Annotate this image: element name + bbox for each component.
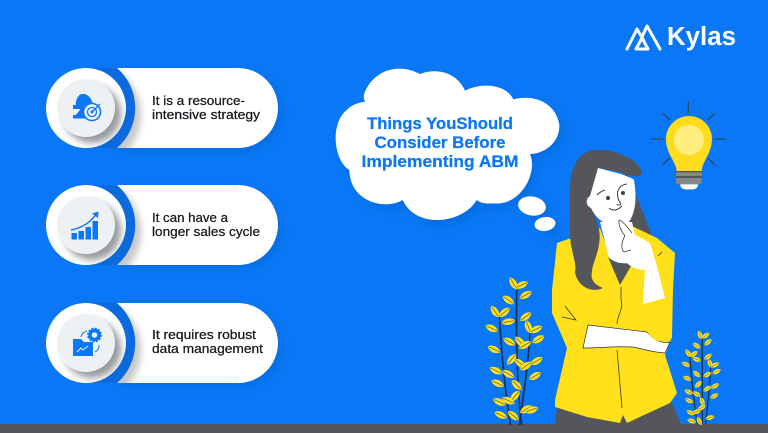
trousers bbox=[555, 398, 681, 424]
title: Consider Before bbox=[374, 134, 506, 152]
text: intensive strategy bbox=[152, 107, 261, 122]
jacket bbox=[552, 226, 677, 423]
text: It requires robust bbox=[152, 327, 256, 342]
hair front bbox=[570, 150, 642, 290]
text: longer sales cycle bbox=[152, 224, 260, 239]
icon: chess knight and target bbox=[73, 94, 100, 120]
plant: right bbox=[681, 330, 722, 426]
face bbox=[587, 168, 635, 227]
title: Implementing ABM bbox=[362, 153, 518, 171]
icon: folder with gear bbox=[73, 328, 101, 356]
text: It is a resource- bbox=[152, 93, 245, 108]
text: It can have a bbox=[152, 210, 229, 225]
title: Things YouShould bbox=[367, 115, 513, 133]
shirt bbox=[608, 257, 634, 285]
hair back bbox=[625, 170, 653, 245]
panel: resource-intensive strategy bbox=[46, 68, 282, 155]
thought cloud bbox=[336, 69, 564, 237]
panel: longer sales cycle bbox=[46, 185, 282, 272]
neck bbox=[600, 222, 642, 265]
hand lines bbox=[619, 220, 662, 256]
jacket cuff bbox=[647, 298, 672, 342]
icon: light bulb bbox=[651, 102, 726, 189]
icon: bar chart with arrow bbox=[71, 212, 98, 240]
logo: Kylas: Kylas bbox=[667, 23, 736, 51]
jacket lines bbox=[562, 287, 622, 408]
illustration: thinking woman bbox=[552, 150, 681, 424]
ground bar bbox=[0, 424, 768, 433]
hand and upper forearm bbox=[619, 220, 665, 304]
panel: robust data management bbox=[46, 303, 282, 390]
logo: Kylas bbox=[627, 23, 736, 51]
text: data management bbox=[152, 341, 263, 356]
plant: left bbox=[484, 276, 546, 425]
lower forearm bbox=[583, 325, 670, 353]
facial features bbox=[597, 184, 627, 210]
